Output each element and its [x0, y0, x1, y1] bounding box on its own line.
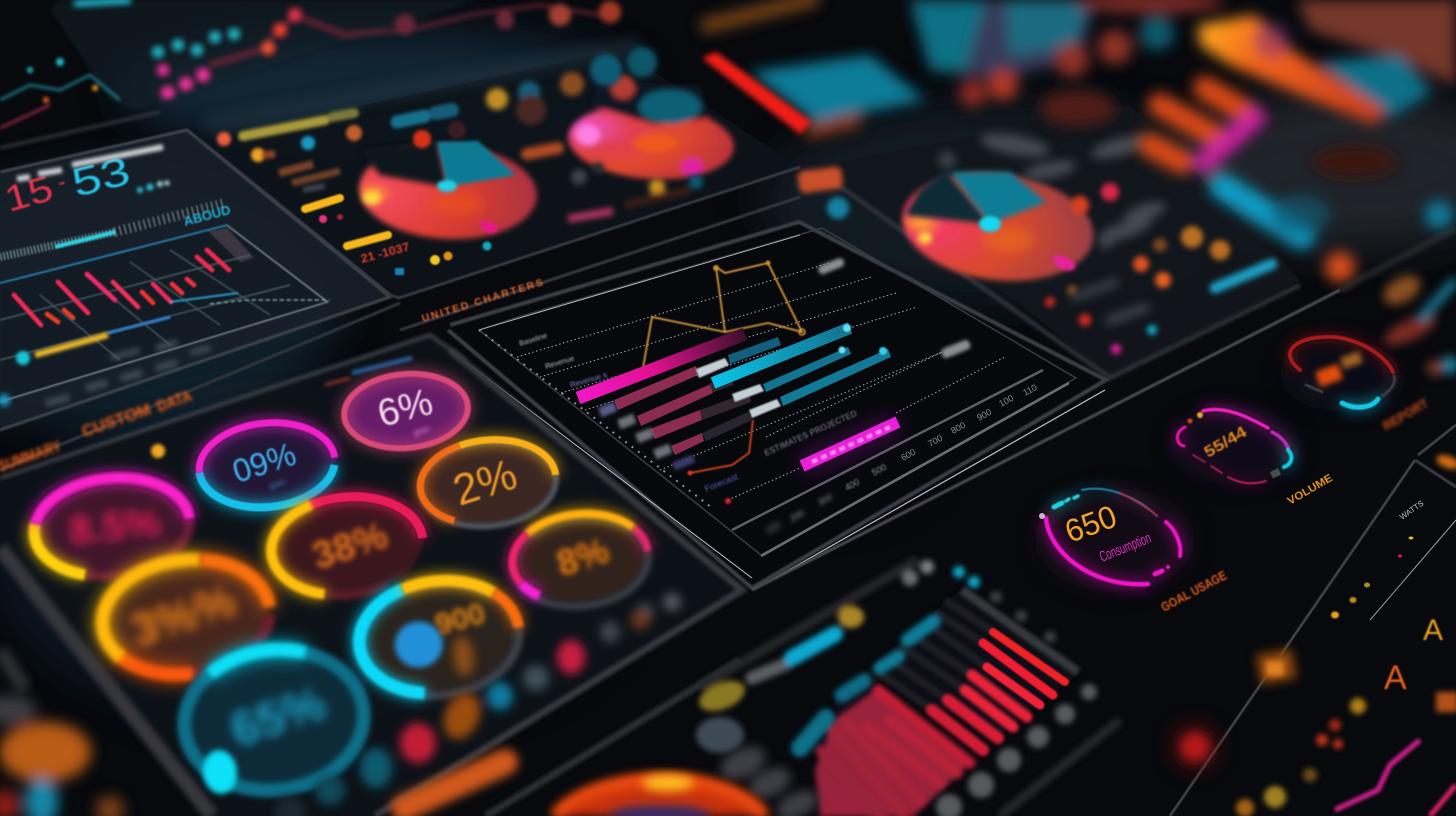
- yellow range bar: [16, 335, 108, 365]
- panel: lower left KPI rings: [0, 335, 745, 816]
- axis tick labels: 300: [816, 492, 834, 508]
- clock digits: 15: [0, 167, 57, 220]
- pie chart: large: [357, 140, 539, 244]
- plot frame: [450, 228, 1105, 578]
- gauge: red ring: REPORT: [1380, 396, 1431, 434]
- gauge: red ring: [1280, 270, 1456, 434]
- panel: bottom right: A: [1384, 659, 1407, 697]
- gold line: [643, 260, 805, 368]
- ring: 6%: 6%: [373, 381, 437, 435]
- axis tick labels: 100: [764, 520, 782, 536]
- clock digits: [0, 149, 134, 220]
- panel: top left dashboard: [0, 130, 400, 470]
- pie chart: far: [566, 75, 736, 185]
- bottom glowing arc: [552, 775, 768, 816]
- legend chips: [217, 110, 466, 190]
- row chips: [598, 402, 695, 470]
- ring: magenta and yellow: 8.5%: [67, 500, 163, 553]
- panel: lower right gauges: [552, 228, 1456, 816]
- panel: upper middle dashboard: [200, 45, 800, 298]
- row labels: Revenue: [544, 354, 575, 371]
- red trend line: [688, 420, 753, 504]
- line chart: [0, 225, 330, 402]
- ring: orange and pink: [266, 489, 428, 603]
- ring: 6%: gain: [412, 424, 431, 438]
- caption: 21 -1037: [359, 239, 411, 266]
- axis tick labels: 800: [949, 420, 967, 436]
- gauge: small magenta: [1170, 405, 1335, 508]
- axis tick labels: [764, 382, 1039, 536]
- ring: amber: 3%%: [124, 573, 242, 657]
- gauge: 650: GOAL USAGE: [1158, 567, 1229, 615]
- ring: yellow and pink: [508, 507, 653, 613]
- ring: magenta and yellow: [29, 470, 195, 584]
- top strip: blurred far charts: [0, 0, 1456, 282]
- top left line chart: [50, 0, 621, 110]
- panel: bottom right: WATTS: [1398, 499, 1425, 522]
- bars: [578, 324, 891, 470]
- panel: right dashboard: [797, 105, 1300, 378]
- pie chart: right: [896, 163, 1100, 291]
- ring: 2%: [416, 433, 560, 533]
- gauge: 650: 650: [1060, 498, 1121, 550]
- header bars: [17, 147, 170, 193]
- left blurred blobs: [0, 696, 124, 816]
- clock digits: 53: [68, 149, 134, 206]
- bar label text: ESTIMATES PROJECTED: [763, 409, 858, 458]
- axis tick labels: 110: [1021, 382, 1039, 398]
- yellow bars: [305, 198, 388, 246]
- section heading: DATA: [155, 388, 195, 416]
- top right blurred shapes: [1150, 0, 1456, 282]
- axis tick labels: 900: [975, 407, 993, 423]
- ring: 2%: 2%: [447, 449, 523, 516]
- row labels: Baseline: [518, 331, 548, 348]
- axis tick labels: 500: [870, 462, 888, 478]
- ring: cyan and orange: [353, 572, 525, 704]
- footer dots: [275, 593, 681, 816]
- ring: 09%: 09%: [228, 436, 300, 490]
- axis tick labels: 200: [788, 508, 806, 524]
- gauge: 650: Consumption: [1097, 530, 1154, 566]
- ring: 6%: [341, 369, 471, 453]
- panel: bottom right: [1170, 425, 1456, 816]
- gauge: small magenta: VOLUME: [1286, 472, 1335, 508]
- ring: amber: [96, 550, 276, 684]
- row labels: [518, 331, 740, 494]
- bar value chips: [696, 358, 781, 418]
- ring: teal: 65%: [224, 676, 332, 758]
- top centre bar chart: [700, 0, 1225, 139]
- legend dots and labels: [797, 166, 1272, 354]
- chart title: UNITED CHARTERS: [420, 277, 544, 325]
- ring: cyan and orange: 900: [432, 597, 489, 642]
- axis tick labels: 400: [843, 477, 861, 493]
- bar chart header strip: [695, 560, 1120, 816]
- section heading: CUSTOM: [80, 401, 153, 441]
- ring: 09%: gain: [268, 476, 287, 491]
- bar chart: red columns: [695, 560, 1120, 816]
- magenta highlight bar: [802, 422, 898, 466]
- ring: 09%: [195, 416, 339, 514]
- ring: yellow and pink: 8%: [552, 529, 614, 584]
- scale strip: ABOUD: [182, 202, 232, 229]
- panel: centre bar chart: [400, 197, 1106, 588]
- top left small chart: [0, 58, 160, 148]
- row labels: Forecast: [703, 471, 740, 494]
- gauge: 650: [1035, 488, 1229, 615]
- caption: [359, 239, 492, 275]
- ring: orange and pink: 38%: [308, 514, 393, 578]
- ring: teal: [176, 640, 372, 800]
- grey pills: [817, 257, 972, 359]
- section heading: [0, 388, 195, 476]
- blurred table rows: [45, 339, 211, 407]
- axis tick labels: 700: [926, 433, 944, 449]
- axis tick labels: 600: [899, 447, 917, 463]
- axis tick labels: 100: [997, 393, 1015, 409]
- back of columns: [833, 590, 1080, 735]
- row labels: Revenue s: [569, 370, 608, 390]
- scale strip: [0, 202, 232, 257]
- clock digits: -: [54, 169, 68, 195]
- gauge: small magenta: 55/44: [1202, 424, 1250, 461]
- dotted grid lines: [517, 263, 1005, 500]
- panel: bottom right: A: [1423, 614, 1443, 647]
